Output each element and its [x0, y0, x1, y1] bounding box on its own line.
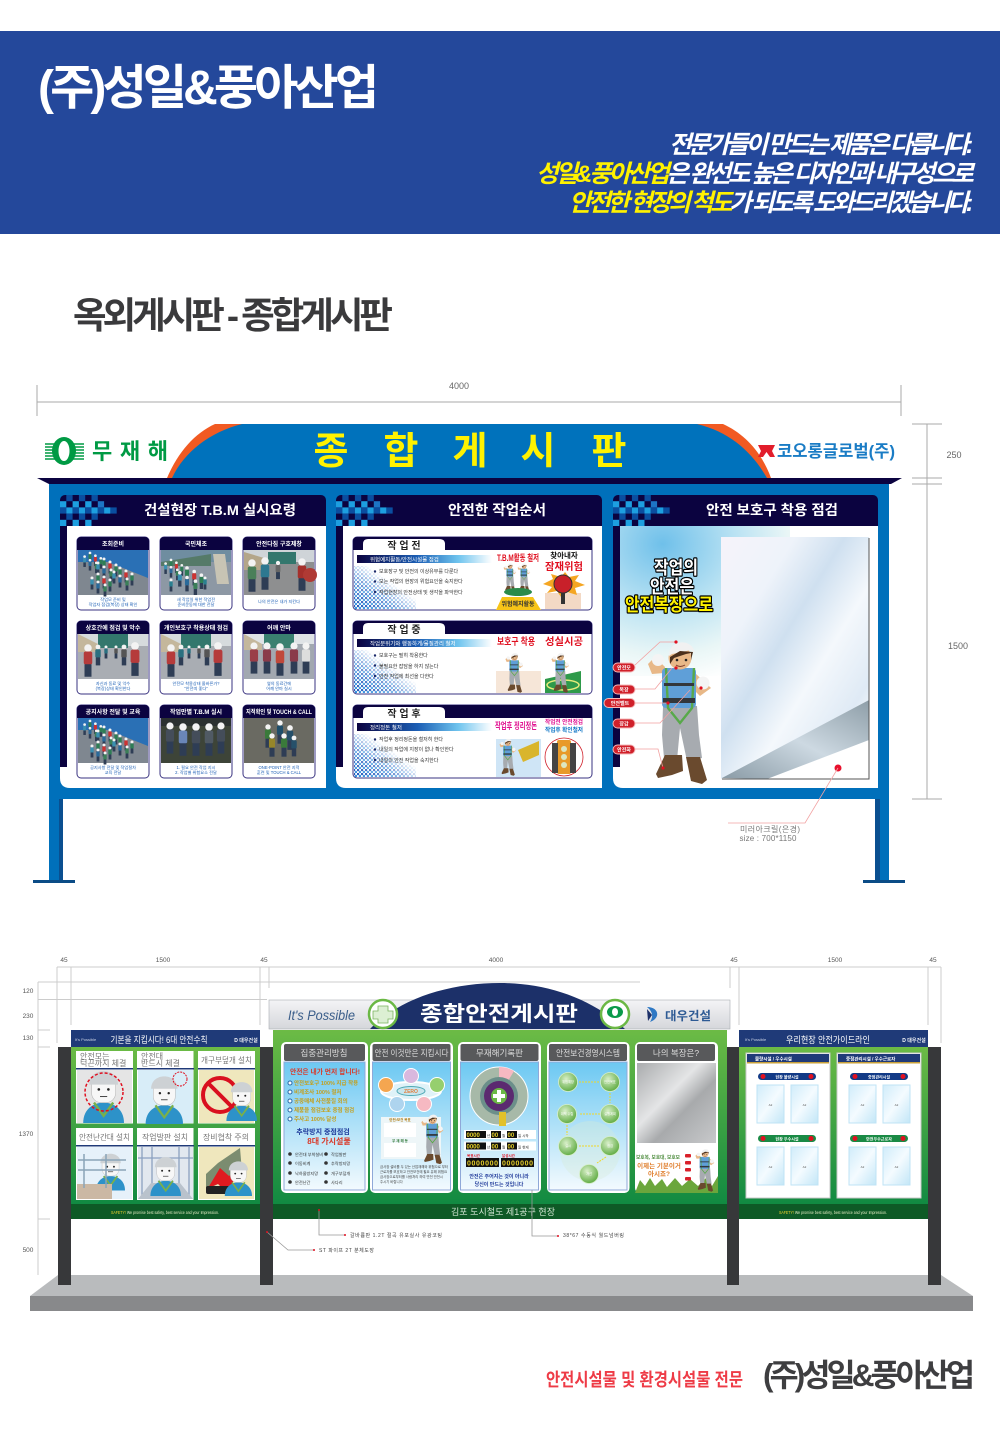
- gear callouts: 장갑: [619, 720, 629, 728]
- flowchart: 점검: [607, 1143, 613, 1148]
- photo card: touch and call: 훈련 및 TOUCH & CALL: [257, 769, 302, 776]
- upper signboard: [33, 424, 905, 883]
- board title: 합: [384, 431, 418, 473]
- gear callouts: [604, 640, 703, 770]
- board title: 시: [521, 431, 555, 473]
- card: safety musts: 근로자를 보호하고 안전보건에 필요 유해 위험요: [380, 1169, 447, 1174]
- pill: excellent worker: [850, 1135, 908, 1142]
- left board: six safety rules: [71, 1030, 260, 1219]
- board title: 게: [453, 431, 487, 473]
- card: focus policy: 사다리: [331, 1179, 343, 1186]
- photo card: gear check: [160, 621, 232, 694]
- rule card: guardrail: 안전난간대 설치: [79, 1132, 130, 1142]
- flowchart: 안전목표: [604, 1079, 616, 1084]
- record counters: 00: [492, 1144, 499, 1150]
- rule card: opening cover: 개구부덮개 설치: [201, 1055, 252, 1065]
- flowchart: 위험예방: [562, 1079, 574, 1084]
- step: after work: [353, 705, 592, 778]
- logo: zero accident: [45, 437, 168, 465]
- card: safety musts: 무 재 해 등: [392, 1138, 409, 1143]
- photo card: mutual check: [77, 621, 149, 694]
- dimension lines: lower board: 1370: [19, 1131, 34, 1138]
- dimension lines: lower board: 45: [929, 957, 937, 964]
- photo card: touch and call: 지적확인 및 TOUCH & CALL: [246, 708, 312, 716]
- panel heading: 안전 보호구 착용 점검: [706, 502, 838, 518]
- flowchart: 대책 수립: [561, 1111, 573, 1116]
- board heading: 기본을 지킵시다! 6대 안전수칙: [110, 1035, 208, 1045]
- step: after work: 내일의 안전 작업을 숙지한다: [379, 757, 439, 764]
- roof dome: [37, 424, 902, 484]
- photo card: team TBM: 작업만별 T.B.M 실시: [170, 708, 222, 716]
- illustration: protective gear: [496, 635, 541, 693]
- illustration: tidy up: [495, 720, 541, 777]
- illustration: faithful work: [545, 635, 583, 693]
- illustration: TBM activity: 위험예지활동: [501, 600, 535, 608]
- dimension lines: lower board: 45: [260, 957, 268, 964]
- header banner: [0, 31, 1000, 234]
- card: accident-free record: [458, 1042, 541, 1193]
- step: after work: 작 업 후: [387, 707, 421, 720]
- material annotations: 갈바륨판 1.2T 절곡 유포실사 유광코팅: [350, 1232, 442, 1239]
- rule card: safety harness: [137, 1051, 194, 1124]
- pill: unsafe: [758, 1073, 816, 1080]
- card: how do I look: 보호복, 보호대, 보호모: [636, 1154, 680, 1161]
- photo card: roll call: 조회준비: [102, 540, 124, 548]
- pill: excellent: [758, 1135, 816, 1142]
- step: before work: 보호장구 및 안전의 이상유무를 다룬다: [379, 568, 459, 575]
- pill: focus: [850, 1073, 908, 1080]
- logo: Daewoo E&C: [647, 1007, 711, 1023]
- illustration: tidy up: 작업후 정리정돈: [495, 720, 537, 731]
- photo card: team TBM: [160, 705, 232, 778]
- mirror acrylic: [721, 537, 869, 779]
- photo card: exercise: 국민체조: [185, 540, 208, 548]
- board heading: 우리현장 안전가이드라인: [786, 1035, 870, 1045]
- photo card: notices: 공지사항 전달 및 작업절차: [90, 764, 136, 771]
- steel posts: [58, 1047, 941, 1285]
- board heading: It's Possible: [745, 1037, 767, 1042]
- step: during work: 보호구는 필히 착용한다: [379, 652, 428, 659]
- card: focus policy: 안전대 부착설비: [295, 1151, 323, 1158]
- board footer slogan: SAFETY! We promise best safety, best service and your Impression.: [779, 1210, 887, 1215]
- dimension lines: lower board: 130: [23, 1035, 34, 1042]
- photo card: touch and call: [243, 705, 315, 778]
- photo card: shoulder massage: [243, 621, 315, 694]
- card: focus policy: 추락방지 중점점검: [296, 1127, 350, 1136]
- ZERO diagram: ZERO: [404, 1089, 418, 1095]
- rule card: helmet strap: 턱끈까지 체결: [80, 1058, 126, 1068]
- dimension lines: lower board: [19, 957, 941, 1275]
- gray header bar: [269, 1000, 730, 1029]
- rule card: safety harness: 반드시 체결: [141, 1058, 180, 1068]
- step: during work: 작 업 중: [387, 623, 421, 636]
- record wheel: [470, 1067, 528, 1126]
- site name strip: 김포 도시철도 제1공구 현장: [451, 1206, 555, 1217]
- dimension lines: lower board: 45: [60, 957, 68, 964]
- record counters: 0000000: [467, 1160, 498, 1168]
- character: saluting worker: [648, 642, 711, 784]
- board heading: D 대우건설: [234, 1037, 258, 1044]
- card: focus policy: 작업발판: [331, 1151, 347, 1158]
- card: focus policy: 추락방지망: [331, 1160, 350, 1167]
- record counters: 달성시간: [502, 1153, 516, 1158]
- photo card: touch and call: ONE-POINT 안전 지적: [259, 764, 300, 771]
- photo card: mutual check: 상호간에 점검 및 악수: [86, 624, 141, 632]
- logo badge: zero accident: [601, 1000, 629, 1028]
- dimension lines: upper board: [37, 381, 968, 799]
- flowchart: [558, 1072, 620, 1184]
- pill: excellent: 현장 우수시설: [775, 1136, 799, 1142]
- flowchart: 실시: [565, 1143, 571, 1148]
- illustration: hidden hazards: 찾아내자: [550, 550, 578, 560]
- card: safety musts: 안전•보건 목표: [389, 1117, 412, 1122]
- card: how do I look: 나의 복장은?: [653, 1048, 699, 1058]
- logo badge: cross: [369, 1000, 397, 1028]
- step: before work: [353, 537, 592, 610]
- photo card: chant: [243, 537, 317, 610]
- photo card: roll call: 작업모 준비 및: [100, 596, 126, 603]
- dimension lines: lower board: 230: [23, 1013, 34, 1020]
- guideline card: unsafe and excellent facilities: [746, 1053, 830, 1198]
- board heading: D 대우건설: [902, 1037, 926, 1044]
- card: focus policy: 공중매체 사전품질 회의: [294, 1097, 348, 1105]
- card: safety musts: 안전 이것만은 지킵시다: [374, 1048, 449, 1058]
- card: how do I look: [635, 1042, 718, 1193]
- lower signboard: [58, 983, 941, 1285]
- step: during work: 안전 작업에 최선을 다한다: [379, 673, 434, 680]
- card: focus policy: 비계조사 100% 철저: [294, 1088, 341, 1096]
- photo card: shoulder massage: 옆의 동료간에: [267, 680, 291, 687]
- card: focus policy: 안전난간: [295, 1179, 311, 1185]
- board frame: [49, 484, 889, 799]
- dimension lines: lower board: 4000: [489, 957, 504, 964]
- record counters: 0000000: [502, 1160, 533, 1168]
- center board: general safety board: [269, 983, 730, 1219]
- illustration: hidden hazards: [543, 550, 585, 609]
- card: safety and health system: 안전보건경영시스템: [556, 1048, 620, 1058]
- illustration: faithful work: 성실시공: [545, 635, 583, 648]
- illustration: TBM activity: [496, 552, 541, 610]
- photo card: gear check: 개인보호구 착용상태 점검: [164, 624, 228, 632]
- record counters: 일 시작: [518, 1133, 529, 1138]
- board title: 판: [592, 431, 626, 473]
- gear callouts: 안전모: [617, 664, 631, 672]
- step: during work: 작업분위기와 행동하게/물질관리 철저: [370, 640, 456, 648]
- illustration: safety check: 작업전 안전점검: [545, 718, 583, 726]
- footer tagline: 안전시설물 및 환경시설물 전문: [546, 1370, 743, 1390]
- record counters: 00: [492, 1133, 499, 1139]
- record counters: 00: [508, 1144, 515, 1150]
- card: safety musts: 주시기 바랍니다: [380, 1179, 404, 1184]
- logo: Daewoo E&C: 대우건설: [665, 1009, 711, 1023]
- panel heading: 건설현장 T.B.M 실시요령: [144, 502, 296, 518]
- rule card: platform: 작업발판 설치: [142, 1132, 188, 1142]
- dimension lines: lower board: 1500: [828, 957, 843, 964]
- record counters: 0000: [466, 1144, 481, 1150]
- section heading: 옥외게시판 - 종합게시판: [73, 295, 393, 336]
- ground base: [30, 1275, 973, 1311]
- right board: site guidelines: [739, 1030, 928, 1219]
- board heading: [75, 1035, 258, 1045]
- card: focus policy: 안전은 내가 먼저 합니다!: [290, 1067, 360, 1076]
- step: before work: 작 업 전: [387, 539, 421, 552]
- photo card: team TBM: 1. 필요 안전 작업 지시: [177, 764, 216, 771]
- record counters: 목표시간: [467, 1153, 481, 1158]
- record counters: 00: [508, 1133, 515, 1139]
- card: focus policy: 주사고 100% 달성: [294, 1115, 336, 1123]
- mirror annotation: [728, 764, 842, 843]
- tagline: 전문가들이 만드는 제품은 다릅니다.: [669, 132, 973, 159]
- illustration: protective gear: 보호구 착용: [497, 635, 535, 648]
- step: after work: 정리정돈 철저: [370, 724, 402, 732]
- step: after work: 내일의 작업에 지장이 없나 확인한다: [379, 746, 454, 753]
- footer: [546, 1357, 975, 1393]
- photo card: roll call: [77, 537, 149, 610]
- material annotations: ST 파이프 2T 분체도장: [319, 1247, 374, 1254]
- dimension lines: lower board: 45: [730, 957, 738, 964]
- mirror annotation: 미러아크릴(은경): [740, 824, 800, 834]
- card: safety and health system: [547, 1042, 630, 1193]
- slogan: [625, 558, 713, 615]
- board title: 종합안전게시판: [420, 1003, 578, 1026]
- photo card: shoulder massage: 어깨 안마 실시: [266, 685, 292, 692]
- illustration: safety check: [545, 718, 583, 776]
- card: safety musts: 금사장 설비를 두 있는 산업재해와 위험으로 부터: [380, 1164, 448, 1169]
- board heading: [745, 1035, 926, 1045]
- board title: [314, 431, 626, 473]
- slogan: 안전은: [650, 577, 694, 597]
- rule card: helmet strap: 안전모는: [80, 1051, 109, 1061]
- slogan: 안전복장으로: [625, 595, 713, 615]
- photo card: exercise: 새 작업일 위한 작업전: [177, 596, 215, 603]
- dimension lines: upper board: 250: [946, 450, 962, 460]
- it's possible: It's Possible: [288, 1007, 355, 1023]
- record counters: 년: [487, 1133, 490, 1138]
- logo: zero accident: 무재해: [92, 439, 168, 464]
- gear callouts: 안전벨트: [611, 700, 630, 707]
- dimension lines: upper board: 1500: [948, 641, 968, 651]
- panel: safe work order: [336, 495, 602, 788]
- photo card: exercise: 준비운동에 대한 전달: [177, 601, 215, 608]
- company title: (주)성일&풍아산업: [38, 62, 379, 115]
- dimension lines: upper board: 4000: [449, 381, 469, 391]
- panel heading: 안전한 작업순서: [448, 502, 546, 518]
- logo: Kolon Global: 코오롱글로벌(주): [777, 442, 895, 461]
- illustration: safety check: 작업후 확인철저: [545, 726, 583, 734]
- slogan: 작업의: [654, 558, 698, 578]
- gear callouts: 안전화: [617, 746, 631, 754]
- step: before work: 작업현장의 안전상태 및 생각을 파악한다: [379, 589, 463, 596]
- card: focus policy: 8대 가시설물: [307, 1136, 351, 1146]
- rule card: guardrail: [76, 1128, 133, 1200]
- flowchart: 개선: [586, 1171, 592, 1176]
- card: focus policy: 제품을 점검보호 중점 점검: [294, 1106, 354, 1114]
- card: how do I look: 이제는 기분이거: [637, 1161, 681, 1170]
- board footer slogan: SAFETY! We promise best safety, best service and your Impression.: [111, 1210, 219, 1215]
- photo card: team TBM: 2. 작업별 위험요소 전달: [175, 769, 217, 776]
- photo card: notices: 공지사항 전달 및 교육: [86, 708, 141, 716]
- record counters: 월: [502, 1133, 505, 1138]
- record counters: 년: [487, 1144, 490, 1150]
- rule card: equipment pinch: [198, 1128, 255, 1200]
- card: focus policy: 낙하물방지망: [295, 1170, 318, 1177]
- photo card: chant: 안전다짐 구호제창: [256, 540, 302, 548]
- card: safety musts: [370, 1042, 453, 1193]
- board title: 종: [314, 431, 348, 473]
- support posts: [33, 799, 905, 883]
- rule card: platform: [137, 1128, 194, 1200]
- pill: focus: 중점관리시설: [868, 1074, 890, 1080]
- guideline card: unsafe and excellent facilities: 불량시설 / 우수시설: [755, 1056, 792, 1062]
- step: during work: 불필요한 잡담을 하지 않는다: [379, 663, 439, 670]
- dimension lines: lower board: 1500: [156, 957, 171, 964]
- material annotations: 38*67 수동식 월드넘버링: [563, 1232, 624, 1239]
- photo card: chant: 나의 안전은 내가 지킨다: [258, 598, 300, 605]
- navy dome: [370, 983, 625, 1029]
- card: how do I look: 아시죠?: [648, 1169, 670, 1178]
- flowchart: 실행계획: [604, 1111, 616, 1116]
- guideline card: focus facilities: [837, 1053, 921, 1198]
- pill: excellent worker: 안전우수근로자: [866, 1136, 892, 1142]
- tagline: 성일&풍아산업은 완선도 높은 디자인과 내구성으로: [536, 161, 975, 188]
- rule card: equipment pinch: 장비협착 주의: [203, 1132, 249, 1142]
- photo card: gear check: "안전띠 좋다": [184, 685, 208, 692]
- photo card: mutual check: (복장)상태 확인한다: [96, 685, 131, 692]
- step: during work: [353, 621, 592, 694]
- tagline: 안전한 현장의 척도가 되도록 도와드리겠습니다.: [569, 190, 973, 217]
- record counters: 월: [502, 1144, 505, 1150]
- card: accident-free record: 안전은 주어지는 것이 아니라: [469, 1173, 529, 1180]
- pill: unsafe: 현장 불량시설: [775, 1074, 799, 1080]
- dimension lines: lower board: 120: [23, 988, 34, 995]
- photo card: exercise: [160, 537, 232, 610]
- record counters: [464, 1130, 536, 1168]
- panel: protective gear check: [604, 495, 878, 788]
- photo card: notices: [77, 705, 149, 778]
- ZERO diagram: [378, 1068, 444, 1112]
- photo card: roll call: 작업자 점검(복장) 상태 확인: [89, 601, 137, 608]
- mirror annotation: size : 700*1150: [740, 834, 797, 843]
- step: before work: 모는 작업의 현장의 위험요인을 숙지한다: [379, 578, 463, 585]
- material annotations: [266, 1190, 624, 1254]
- rule card: helmet strap: [76, 1051, 133, 1124]
- board heading: It's Possible: [75, 1037, 97, 1042]
- card: accident-free record: 무재해기록판: [476, 1048, 523, 1058]
- card: focus policy: 안전보호구 100% 지급 착용: [294, 1079, 358, 1087]
- step: before work: 위험예지활동/안전시설물 점검: [370, 556, 439, 564]
- footer company name: (주)성일&풍아산업: [763, 1357, 975, 1393]
- rule card: opening cover: [198, 1051, 257, 1124]
- illustration: TBM activity: T.B.M활동 철저: [497, 552, 539, 563]
- photo card: gear check: 안전모 착용상태 올바른가?: [172, 680, 220, 687]
- photo card: notices: 교육 전달: [105, 769, 121, 776]
- record counters: 0000: [466, 1133, 481, 1139]
- illustration: hidden hazards: 잠재위험: [545, 560, 583, 573]
- record counters: 일 현재: [518, 1144, 529, 1150]
- dimension lines: lower board: 500: [23, 1247, 34, 1254]
- panel: T.B.M procedure: [60, 495, 326, 788]
- rule card: safety harness: 안전대: [141, 1051, 163, 1061]
- gear callouts: 복장: [619, 686, 629, 694]
- card: focus policy: 개구부덮개: [331, 1170, 350, 1177]
- card: focus policy: 집중관리방침: [301, 1048, 347, 1058]
- card: focus policy: 이동비계: [295, 1160, 311, 1167]
- tagline: [536, 132, 975, 217]
- photo card: shoulder massage: 어깨 안마: [267, 624, 291, 632]
- step: after work: 작업후 정리정돈을 철저히 한다: [379, 736, 443, 743]
- card: focus policy: [281, 1042, 368, 1193]
- card: safety musts: 금사장으로부터를 사람처리 하여 만전 안전시: [380, 1174, 443, 1179]
- card: accident-free record: 당신이 만드는 것입니다: [475, 1181, 524, 1188]
- photo card: mutual check: 자신과 동료 및 악수: [96, 680, 130, 687]
- guideline card: focus facilities: 중점관리시설 / 우수근로자: [846, 1056, 896, 1062]
